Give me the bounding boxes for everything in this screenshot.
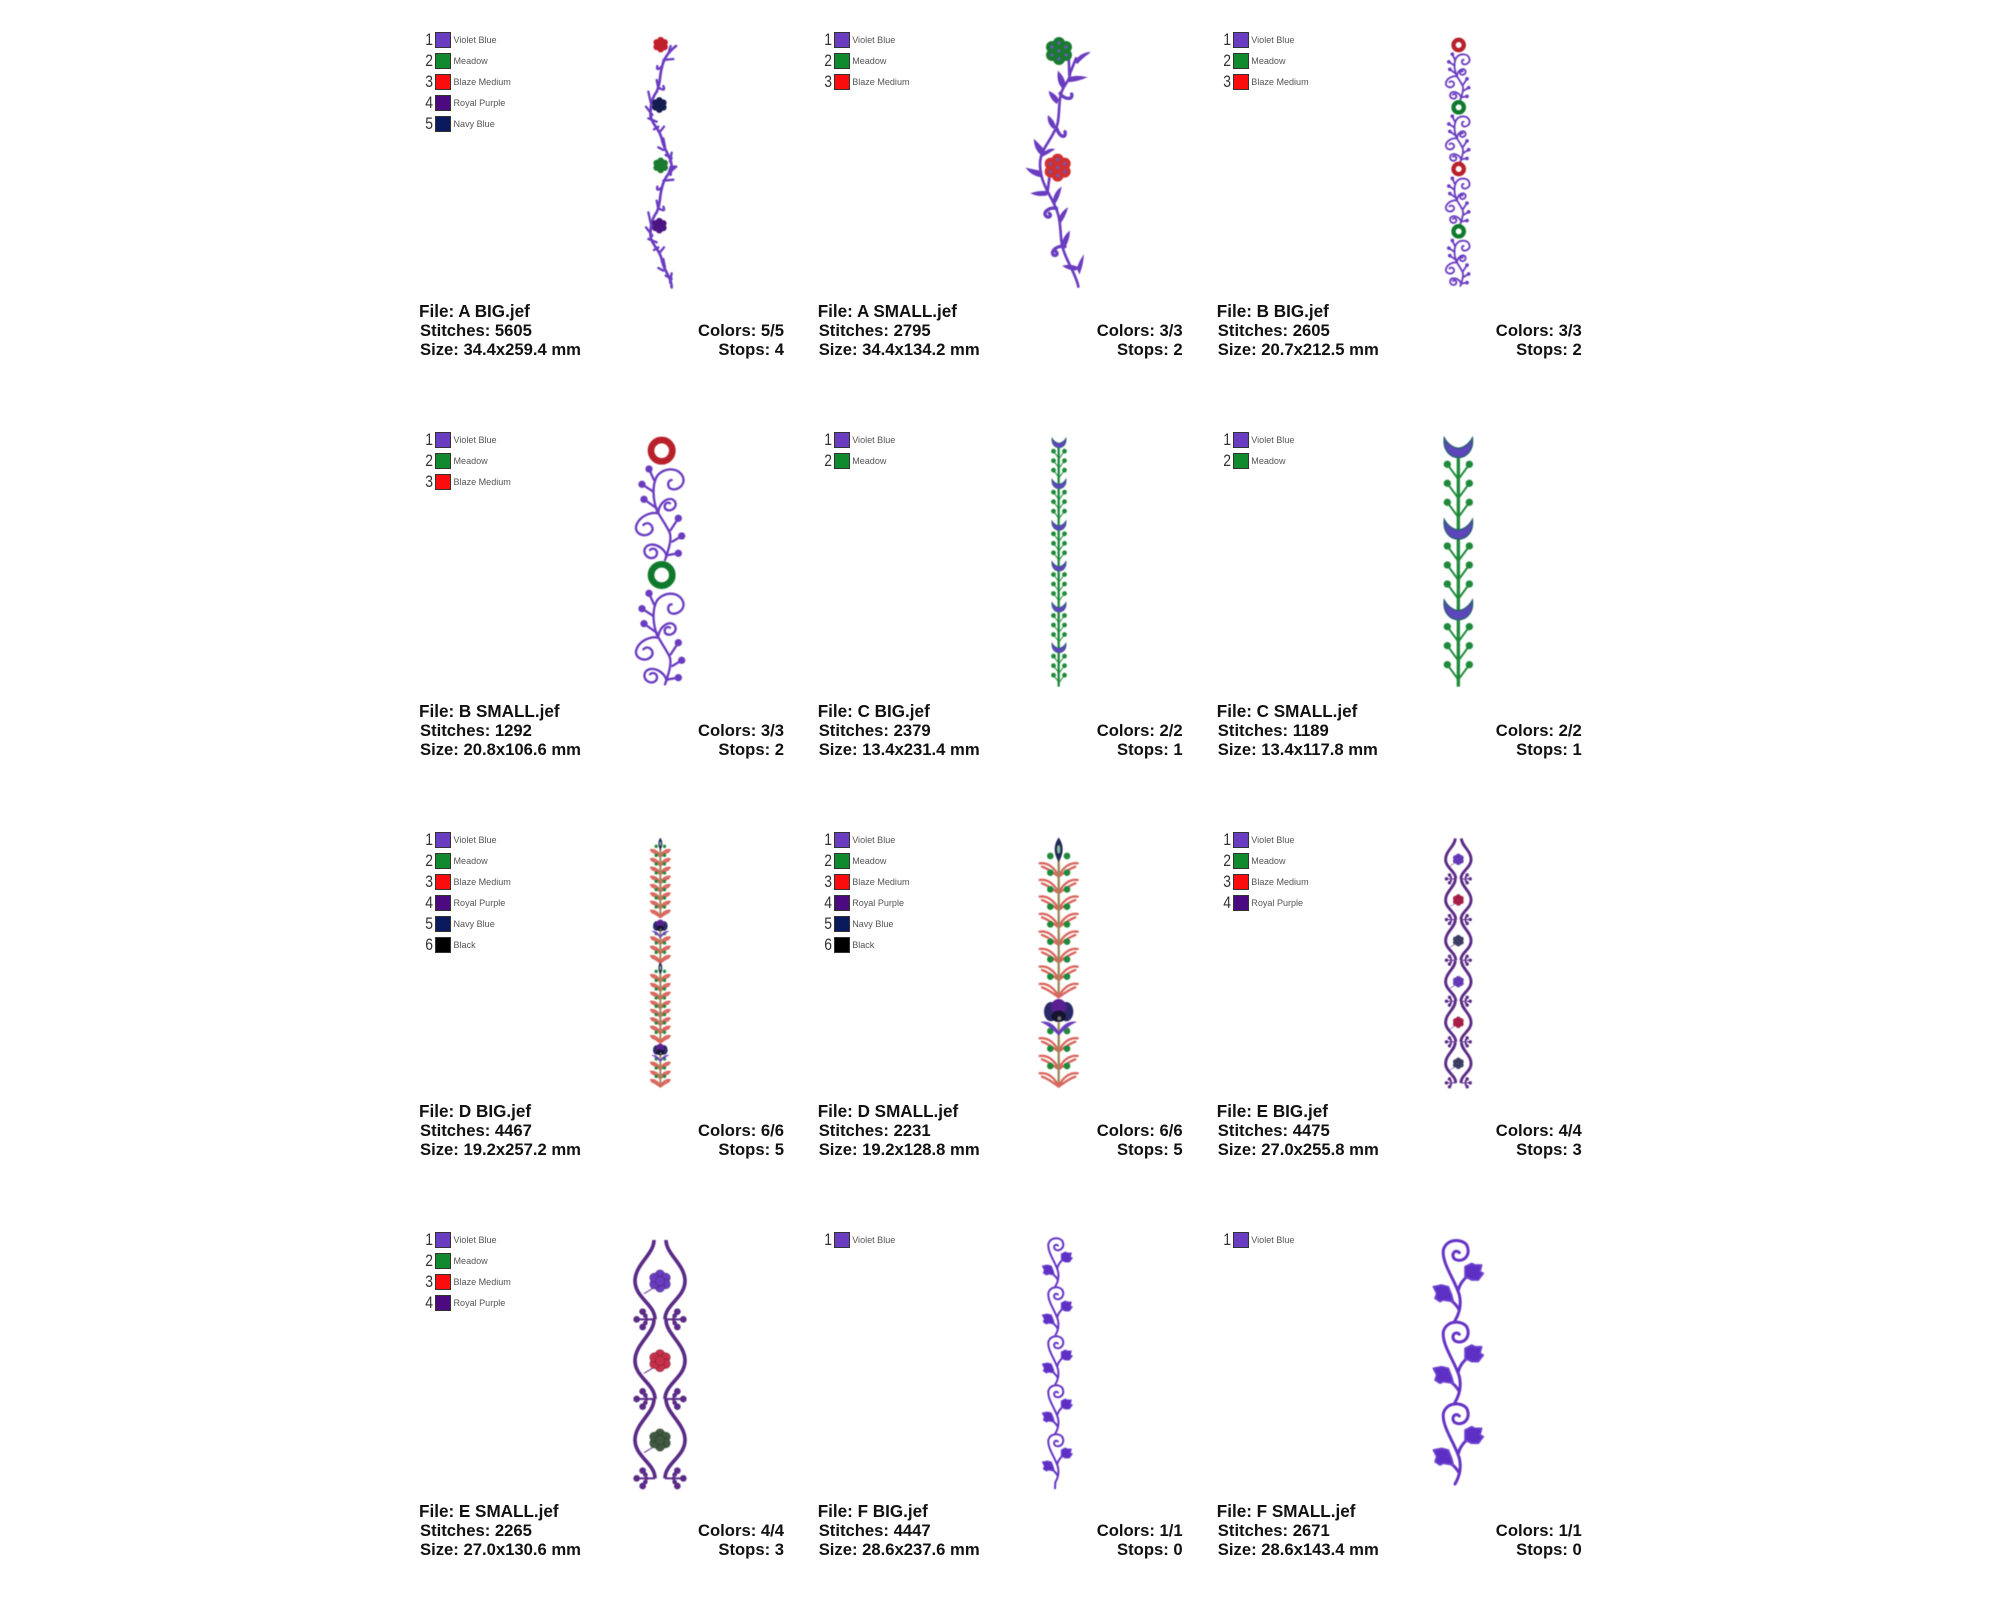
legend: thread colours: 4 [425, 93, 433, 112]
legend: thread colours: Meadow [1251, 456, 1286, 466]
motif: D SMALL feathered column [1038, 837, 1080, 1088]
text: colours and stops [1496, 720, 1582, 758]
legend: thread colours: 4 [824, 893, 832, 912]
legend: thread colours: Meadow [454, 456, 488, 466]
text: file details: Stitches: 1292 [420, 720, 532, 740]
legend: thread colours: Royal Purple [454, 1298, 505, 1308]
text: colours and stops: Colors: 6/6 [1097, 1121, 1183, 1140]
text: colours and stops [698, 1121, 784, 1159]
legend: thread colours: Blaze Medium [454, 877, 511, 887]
panel: E BIG [1208, 816, 1593, 1166]
legend: thread colours: Royal Purple [454, 98, 505, 108]
text: file details [419, 302, 581, 359]
panel: B SMALL [419, 430, 784, 758]
text: file details [1217, 702, 1378, 758]
text: file details: File: B BIG.jef [1217, 302, 1329, 321]
text: colours and stops: Stops: 3 [1516, 1140, 1582, 1159]
text: file details: File: E BIG.jef [1217, 1102, 1328, 1121]
legend: thread colours [1223, 30, 1309, 91]
text: file details: Size: 19.2x257.2 mm [420, 1140, 581, 1159]
legend: thread colours: 1 [425, 430, 433, 448]
text: colours and stops [1432, 1121, 1582, 1159]
text: colours and stops: Stops: 2 [1516, 340, 1582, 359]
text: file details: Stitches: 2265 [420, 1521, 532, 1540]
legend: thread colours: Violet Blue [1251, 434, 1294, 444]
legend: thread colours: Navy Blue [852, 919, 893, 929]
legend: thread colours: Black [454, 940, 476, 950]
legend: thread colours: 1 [824, 830, 832, 849]
legend: thread colours: Royal Purple [1251, 898, 1303, 908]
legend: thread colours: Blaze Medium [454, 1277, 511, 1287]
legend: thread colours: 1 [1223, 30, 1231, 49]
text: colours and stops [1097, 1121, 1183, 1159]
text: colours and stops [1097, 321, 1183, 359]
legend: thread colours: 3 [1223, 72, 1231, 91]
text: colours and stops [634, 1521, 784, 1559]
text: file details: Stitches: 2795 [819, 321, 931, 340]
text: file details: Size: 13.4x231.4 mm [819, 740, 980, 758]
panel: E SMALL [410, 1216, 795, 1566]
text: file details [818, 1102, 980, 1159]
text: colours and stops: Colors: 1/1 [1097, 1521, 1183, 1540]
legend: thread colours: Meadow [852, 456, 886, 466]
text: file details: Stitches: 4447 [819, 1521, 931, 1540]
motif: F BIG leaf vine [1000, 1230, 1130, 1510]
legend: thread colours: 5 [425, 914, 433, 933]
text: file details: Stitches: 1189 [1218, 720, 1329, 740]
text: file details: Size: 20.8x106.6 mm [420, 740, 581, 758]
legend: thread colours: Navy Blue [454, 119, 495, 129]
motif: C BIG crescent stem [1050, 436, 1068, 688]
legend: thread colours: Blaze Medium [1251, 77, 1309, 87]
legend: thread colours: 5 [824, 914, 832, 933]
legend: thread colours: Royal Purple [852, 898, 904, 908]
legend: thread colours: 4 [425, 1293, 433, 1312]
text: colours and stops [1496, 321, 1582, 359]
text: file details: File: F SMALL.jef [1217, 1502, 1355, 1521]
text: file details: Size: 19.2x128.8 mm [819, 1140, 980, 1159]
legend: thread colours: Violet Blue [454, 835, 497, 845]
text: file details [419, 1102, 581, 1159]
text: file details: File: A SMALL.jef [818, 302, 957, 321]
text: file details: Size: 27.0x130.6 mm [420, 1540, 581, 1559]
text: file details: Stitches: 4475 [1218, 1121, 1330, 1140]
legend: thread colours: Black [852, 940, 874, 950]
legend: thread colours: 1 [425, 30, 433, 49]
text: colours and stops: Stops: 2 [718, 740, 784, 758]
panel: F SMALL [1208, 1216, 1593, 1566]
legend: thread colours: 4 [1223, 893, 1231, 912]
panel: C SMALL [1217, 430, 1582, 758]
legend: thread colours: Violet Blue [1251, 35, 1294, 45]
text: colours and stops: Colors: 6/6 [698, 1121, 784, 1140]
legend: thread colours: 5 [425, 114, 433, 133]
legend: thread colours: 1 [824, 1230, 832, 1249]
text: file details: File: C BIG.jef [818, 702, 930, 720]
text: colours and stops: Stops: 4 [718, 340, 784, 359]
text: file details: Size: 34.4x134.2 mm [819, 340, 980, 359]
text: colours and stops: Stops: 5 [718, 1140, 784, 1159]
legend: thread colours: Violet Blue [1251, 835, 1294, 845]
text: colours and stops: Stops: 1 [1516, 740, 1582, 758]
text: file details: File: A BIG.jef [419, 302, 530, 321]
panel: A BIG [419, 30, 784, 359]
legend: thread colours: Meadow [454, 56, 488, 66]
legend: thread colours: Meadow [852, 856, 886, 866]
legend: thread colours: Violet Blue [454, 434, 497, 444]
legend: thread colours: Blaze Medium [1251, 877, 1309, 887]
legend: thread colours [425, 830, 511, 954]
text: colours and stops [1432, 1521, 1582, 1559]
text: file details [818, 1502, 1048, 1559]
text: file details [1217, 1102, 1447, 1159]
text: file details: Size: 28.6x237.6 mm [819, 1540, 980, 1559]
motif: B BIG scroll border [1444, 36, 1472, 288]
legend: thread colours: Meadow [852, 56, 886, 66]
legend: thread colours: 1 [824, 430, 832, 448]
text: colours and stops: Stops: 0 [1117, 1540, 1183, 1559]
text: colours and stops: Colors: 2/2 [1097, 720, 1183, 740]
legend: thread colours: 3 [425, 472, 433, 490]
legend: thread colours: Meadow [454, 856, 488, 866]
legend: thread colours: 1 [425, 830, 433, 849]
text: colours and stops: Colors: 5/5 [698, 321, 784, 340]
legend: thread colours: Meadow [1251, 856, 1286, 866]
legend: thread colours: Navy Blue [454, 919, 495, 929]
legend: thread colours [425, 30, 511, 133]
panel: C BIG [818, 430, 1183, 758]
text: file details: Stitches: 2671 [1218, 1521, 1330, 1540]
legend: thread colours: 3 [824, 72, 832, 91]
motif: A SMALL floral vine [1025, 36, 1091, 289]
legend: thread colours: 1 [1223, 430, 1231, 448]
legend: thread colours: 2 [824, 851, 832, 870]
motif: B SMALL scroll border [634, 436, 686, 686]
legend: thread colours: Royal Purple [454, 898, 505, 908]
text: colours and stops: Colors: 3/3 [1097, 321, 1183, 340]
text: file details [818, 302, 980, 359]
legend: thread colours: 3 [1223, 872, 1231, 891]
text: file details [419, 702, 581, 758]
text: file details [419, 1502, 649, 1559]
legend: thread colours: Violet Blue [1251, 1235, 1294, 1245]
text: file details: Stitches: 2379 [819, 720, 931, 740]
legend: thread colours: Violet Blue [454, 35, 497, 45]
legend: thread colours: 2 [1223, 450, 1231, 470]
panel: F BIG [809, 1216, 1194, 1566]
legend: thread colours: 2 [425, 51, 433, 70]
motif: F SMALL leaf vine [1400, 1230, 1530, 1510]
motif: D BIG feathered column [649, 837, 672, 1088]
legend: thread colours: Violet Blue [852, 35, 895, 45]
legend: thread colours: Blaze Medium [852, 877, 910, 887]
motif: E BIG wave border [1400, 830, 1530, 1110]
text: file details: Size: 34.4x259.4 mm [420, 340, 581, 359]
panel: B BIG [1217, 30, 1582, 359]
motif: C SMALL crescent stem [1442, 436, 1474, 688]
text: file details [1217, 1502, 1447, 1559]
legend: thread colours: 2 [1223, 51, 1231, 70]
motif: A BIG floral vine [644, 36, 678, 290]
legend: thread colours [809, 1232, 929, 1253]
text: file details: File: F BIG.jef [818, 1502, 928, 1521]
text: file details: Size: 27.0x255.8 mm [1218, 1140, 1379, 1159]
motif: E SMALL wave border [600, 1230, 730, 1510]
legend: thread colours: Blaze Medium [454, 476, 511, 486]
legend: thread colours: Meadow [1251, 56, 1286, 66]
legend: thread colours: 2 [824, 51, 832, 70]
legend: thread colours [1223, 430, 1294, 470]
legend: thread colours: Blaze Medium [454, 77, 511, 87]
text: file details: Stitches: 2605 [1218, 321, 1330, 340]
text: file details: File: B SMALL.jef [419, 702, 560, 720]
legend: thread colours: 1 [1223, 830, 1231, 849]
text: colours and stops: Stops: 5 [1117, 1140, 1183, 1159]
legend: thread colours: 3 [425, 1272, 433, 1291]
legend: thread colours: 2 [425, 1251, 433, 1270]
legend: thread colours [824, 30, 910, 91]
text: file details: Stitches: 4467 [420, 1121, 532, 1140]
text: colours and stops: Colors: 1/1 [1496, 1521, 1582, 1540]
text: colours and stops: Colors: 4/4 [698, 1521, 784, 1540]
legend: thread colours: Violet Blue [852, 835, 895, 845]
text: file details: File: E SMALL.jef [419, 1502, 559, 1521]
legend: thread colours [1208, 1232, 1328, 1253]
legend: thread colours: Meadow [454, 1256, 488, 1266]
text: file details: Stitches: 2231 [819, 1121, 931, 1140]
text: colours and stops [698, 720, 784, 758]
text: colours and stops: Stops: 3 [718, 1540, 784, 1559]
legend: thread colours: 4 [425, 893, 433, 912]
text: colours and stops: Stops: 0 [1516, 1540, 1582, 1559]
text: file details: File: C SMALL.jef [1217, 702, 1357, 720]
text: file details [818, 702, 980, 758]
legend: thread colours: 3 [824, 872, 832, 891]
legend: thread colours [824, 430, 895, 470]
text: colours and stops [1097, 720, 1183, 758]
text: colours and stops: Colors: 2/2 [1496, 720, 1582, 740]
legend: thread colours: Violet Blue [852, 1235, 895, 1245]
text: colours and stops: Stops: 1 [1117, 740, 1183, 758]
text: file details: Size: 28.6x143.4 mm [1218, 1540, 1379, 1559]
legend: thread colours: 2 [425, 851, 433, 870]
text: colours and stops [1033, 1521, 1183, 1559]
legend: thread colours: Violet Blue [852, 434, 895, 444]
text: file details: Size: 13.4x117.8 mm [1218, 740, 1378, 758]
legend: thread colours: 6 [425, 935, 433, 954]
legend: thread colours [425, 430, 511, 490]
legend: thread colours: 6 [824, 935, 832, 954]
legend: thread colours: Violet Blue [454, 1235, 497, 1245]
text: colours and stops [698, 321, 784, 359]
legend: thread colours [1208, 832, 1328, 916]
text: colours and stops: Colors: 3/3 [698, 720, 784, 740]
legend: thread colours: 3 [425, 72, 433, 91]
panel: D BIG [419, 830, 784, 1159]
legend: thread colours: 1 [1223, 1230, 1231, 1249]
legend: thread colours: 3 [425, 872, 433, 891]
text: file details: File: D BIG.jef [419, 1102, 531, 1121]
legend: thread colours: 2 [425, 450, 433, 470]
legend: thread colours: 2 [824, 450, 832, 470]
legend: thread colours: Blaze Medium [852, 77, 910, 87]
legend: thread colours [824, 830, 910, 954]
text: colours and stops: Colors: 4/4 [1496, 1121, 1582, 1140]
text: file details: Size: 20.7x212.5 mm [1218, 340, 1379, 359]
panel: D SMALL [818, 830, 1183, 1159]
legend: thread colours: 1 [824, 30, 832, 49]
text: file details: Stitches: 5605 [420, 321, 532, 340]
text: file details [1217, 302, 1379, 359]
text: colours and stops: Colors: 3/3 [1496, 321, 1582, 340]
text: file details: File: D SMALL.jef [818, 1102, 958, 1121]
text: colours and stops: Stops: 2 [1117, 340, 1183, 359]
panel: A SMALL [818, 30, 1183, 359]
legend: thread colours: 1 [425, 1230, 433, 1249]
legend: thread colours [410, 1232, 530, 1316]
legend: thread colours: 2 [1223, 851, 1231, 870]
